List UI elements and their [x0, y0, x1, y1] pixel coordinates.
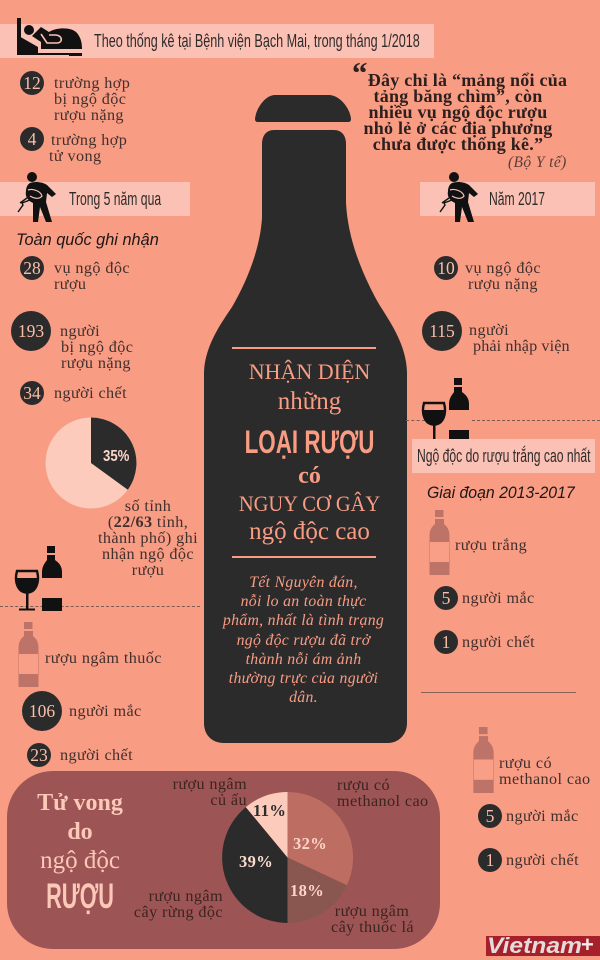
stat: 28: vụ ngộ độc rượu	[54, 259, 130, 293]
stat: 5: 5	[442, 588, 450, 608]
bottle graphic	[204, 95, 407, 743]
icon: wine glass and bottle right	[422, 378, 469, 439]
stat: 28: 28	[23, 258, 41, 278]
stat: 106: người mắc	[69, 702, 142, 720]
pie label: tobacco: rượu ngâm cây thuốc lá	[331, 902, 414, 936]
title: LOẠI RƯỢU	[245, 424, 374, 460]
stat: 115: người	[469, 321, 509, 339]
stat: 4 deaths: tử vong	[49, 147, 102, 165]
stat: 12 cases: 12	[23, 73, 41, 93]
label: methanol: rượu có methanol cao	[499, 754, 591, 788]
quote mark: “	[352, 55, 368, 90]
stat: 1	[434, 630, 535, 654]
icon: person in pain	[18, 172, 56, 222]
panel heading: Tử vong	[37, 790, 123, 816]
stat: 1: người chết	[462, 633, 535, 651]
stat: 193: 193	[18, 321, 44, 341]
stat: 34 deaths: 34	[23, 383, 41, 403]
stat: 4 deaths: 4	[28, 129, 36, 149]
stat: 193	[11, 311, 133, 372]
stat: 1: 1	[442, 632, 450, 652]
bottle rule top	[232, 347, 376, 349]
pie label: methanol: rượu có methanol cao	[337, 776, 429, 810]
pie label: cu au: rượu ngâm củ ấu	[173, 775, 247, 809]
stat: 1	[478, 848, 579, 872]
title: những	[278, 388, 341, 415]
stat: 106	[22, 691, 142, 731]
stat: 12 cases	[20, 71, 130, 124]
stat: 5: người mắc	[462, 589, 535, 607]
stat: 4 deaths	[20, 127, 127, 165]
stat: 5: 5	[486, 806, 494, 826]
bottle: medicinal wine	[18, 622, 38, 687]
stat: 10: vụ ngộ độc	[465, 259, 541, 277]
stat: 115: 115	[429, 321, 455, 341]
title: NHẬN DIỆN	[249, 359, 370, 384]
band: 2017	[420, 182, 595, 216]
stat: 34 deaths: người chết	[54, 384, 127, 402]
stat: 115	[422, 311, 570, 355]
stat: 115: phải nhập viện	[473, 337, 570, 355]
stat: 5: người mắc	[506, 807, 579, 825]
band: five years	[0, 182, 190, 216]
stat: 4 deaths: trường hợp	[51, 131, 127, 149]
stat: 28	[20, 256, 130, 293]
subheading: nationwide: Toàn quốc ghi nhận	[16, 230, 159, 249]
band label: 2017: Năm 2017	[489, 189, 545, 209]
stat: 34 deaths	[20, 381, 127, 405]
icon: person in pain	[440, 172, 478, 222]
subheading: period: Giai đoạn 2013-2017	[427, 483, 575, 502]
panel heading: ngộ độc	[40, 847, 120, 874]
icon: patient in bed	[17, 18, 82, 56]
quote: Đây chỉ là “mảng nổi của tảng băng chìm”, còn nhiều vụ ngộ độc rượu nhỏ lẻ ở các địa phương chưa được thống kê.”	[363, 70, 567, 154]
pie chart: causes of death	[222, 792, 353, 923]
pie label: 35 percent: 35%	[103, 448, 129, 465]
panel heading: RƯỢU	[46, 877, 114, 916]
stat: 12 cases: trường hợp bị ngộ độc rượu nặng	[54, 74, 130, 124]
label: white spirits: rượu trắng	[455, 536, 527, 554]
stat: 23: người chết	[60, 746, 133, 764]
pie value: 18 percent: 18%	[290, 881, 324, 900]
stat: 10	[434, 256, 541, 293]
stat: 10: rượu nặng	[468, 275, 538, 293]
title	[239, 359, 380, 545]
icon: wine glass and bottle left	[14, 546, 62, 611]
bottle: methanol	[473, 727, 494, 793]
dotted divider right	[406, 420, 600, 421]
bottle: white spirits	[430, 510, 450, 575]
panel: deaths	[7, 771, 440, 949]
label: medicinal wine: rượu ngâm thuốc	[45, 649, 162, 667]
stat: 5	[434, 586, 535, 610]
pie: 35 percent of provinces	[46, 418, 136, 508]
pie value: 11 percent: 11%	[253, 801, 286, 820]
stat: 106: 106	[29, 701, 55, 721]
band label: five years: Trong 5 năm qua	[69, 189, 161, 209]
panel heading: do	[67, 819, 93, 845]
pie caption: số tỉnh (22/63 tỉnh, thành phố) ghi nhận ngộ độc rượu	[98, 497, 198, 579]
bottle rule bottom	[232, 556, 376, 558]
bottle paragraph: Tết Nguyên đán, nỗi lo an toàn thực phẩm, nhất là tình trạng ngộ độc rượu đã trở thành nỗi ám ảnh thường trực của người dân.	[223, 574, 384, 706]
pie label: poison plants: rượu ngâm cây rừng độc	[134, 887, 223, 921]
quote source: (Bộ Y tế)	[508, 154, 567, 171]
stat: 1: người chết	[506, 851, 579, 869]
stat: 10: 10	[437, 258, 455, 278]
stat: 193: bị ngộ độc rượu nặng	[61, 338, 133, 372]
stat: 5	[478, 804, 579, 828]
pie value: 32 percent: 32%	[293, 834, 327, 853]
right divider	[421, 692, 576, 693]
panel heading	[37, 790, 123, 916]
stat: 23	[27, 743, 133, 767]
title: có	[298, 463, 321, 489]
dotted divider left	[0, 606, 200, 607]
band label: white spirits: Ngộ độc do rượu trắng cao nhất	[417, 446, 590, 466]
header text: Theo thống kê tại Bệnh viện Bạch Mai, trong tháng 1/2018	[94, 31, 420, 51]
band: white spirits	[412, 439, 595, 473]
header band	[0, 24, 434, 58]
stat: 193: người	[60, 322, 100, 340]
title: NGUY CƠ GÂY	[239, 491, 380, 516]
stat: 1: 1	[486, 850, 494, 870]
pie value: 39 percent: 39%	[239, 852, 273, 871]
title: ngộ độc cao	[249, 518, 370, 545]
stat: 23: 23	[30, 745, 48, 765]
